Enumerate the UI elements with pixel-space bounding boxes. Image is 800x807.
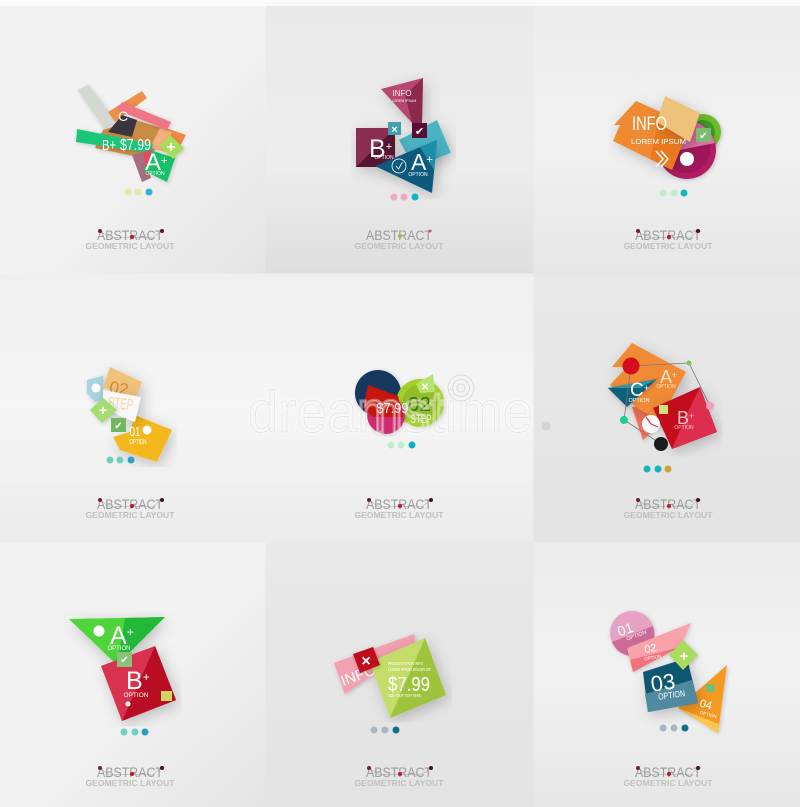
check mark in circle (396, 162, 402, 169)
teal square (399, 120, 451, 167)
step label: STEP (410, 412, 432, 426)
pink circle (610, 611, 654, 655)
orange square (610, 343, 686, 420)
salmon block (632, 405, 667, 440)
salmon facet (630, 647, 680, 672)
orange shade (650, 112, 690, 170)
option A label: + (161, 155, 167, 167)
panel background (534, 542, 800, 807)
option caption: OPTION (145, 171, 165, 177)
label A: + (672, 370, 677, 380)
pink strip (117, 102, 171, 130)
check icon: ✔ (114, 421, 123, 432)
dark card (643, 658, 698, 712)
panel background (0, 6, 266, 274)
logo text: ABSTRACT (97, 496, 163, 512)
option 03 caption: OPTION (658, 688, 686, 702)
step number: 02 (408, 394, 431, 416)
logo text: ABSTRACT (366, 764, 432, 780)
lime tile (416, 374, 435, 393)
info heading: INFO (632, 114, 667, 135)
geometric cluster (355, 370, 444, 434)
panel: top centre, info triangle (266, 6, 534, 274)
teal highlight (608, 379, 657, 388)
pager dots (660, 190, 688, 196)
red square light facet (672, 387, 717, 449)
check tile (111, 418, 126, 432)
green A triangle (143, 150, 175, 182)
small icon (126, 702, 130, 706)
teal triangle (608, 379, 657, 407)
yellow card (113, 415, 172, 462)
watermark word halo: dreamstime (248, 380, 533, 445)
price label: $7.99 (376, 400, 408, 417)
pager dots (644, 466, 672, 472)
green inner ring (691, 120, 715, 144)
watermark (248, 375, 550, 445)
logo text (354, 764, 444, 788)
magenta inner ring (664, 127, 710, 173)
lime diamond (669, 640, 698, 670)
number 03: 03 (649, 668, 677, 697)
logo text: GEOMETRIC LAYOUT (354, 241, 444, 251)
panel background (0, 542, 266, 807)
option A caption: OPTION (408, 172, 428, 178)
peach block (150, 128, 172, 152)
black node (654, 437, 668, 451)
option 01 caption: OPTION (626, 630, 648, 642)
step number: 02 (108, 378, 130, 400)
watermark word: dreamstime (248, 380, 533, 445)
geometric cluster (69, 617, 176, 721)
step label: STEP (107, 395, 134, 414)
logo text: GEOMETRIC LAYOUT (624, 778, 713, 788)
teal triangle (375, 140, 437, 193)
label C: + (644, 383, 649, 393)
lime tile (161, 691, 172, 701)
tan card (103, 367, 142, 400)
red shape (363, 385, 403, 417)
pie icon green (94, 626, 104, 636)
logo text (86, 227, 175, 251)
info triangle shade (405, 78, 423, 123)
option caption A: OPTION (656, 384, 676, 390)
pie icon (680, 152, 694, 166)
inner lime ring (402, 385, 438, 421)
check tile (117, 652, 132, 667)
green circle (685, 114, 721, 150)
plus icon: + (99, 402, 107, 418)
red tile (353, 647, 380, 673)
option B label: + (143, 670, 150, 684)
logo text: ABSTRACT (635, 496, 701, 512)
label A: A (660, 367, 672, 387)
panel: middle centre, circles (266, 274, 534, 542)
panel: middle left, steps (0, 274, 266, 542)
check tile (696, 128, 711, 142)
lorem caption: LOREM IPSUM (631, 137, 686, 146)
card lower facet (645, 680, 698, 712)
red dark facet (122, 646, 176, 721)
lime circle (396, 379, 444, 427)
red square (653, 387, 717, 449)
panel: middle right, network (534, 274, 800, 542)
panel background (266, 274, 534, 542)
option B caption: OPTION (124, 692, 149, 699)
close icon: × (361, 653, 371, 670)
option A label: + (426, 154, 433, 166)
lime diamond (90, 398, 117, 423)
white paper (103, 390, 141, 422)
close tile (388, 122, 401, 135)
check tile (706, 684, 715, 692)
footer caption: ADD YOUR TEXT HERE (388, 693, 421, 698)
plus icon: + (166, 139, 176, 156)
caption lines: PRESENTATION INFO (388, 661, 423, 666)
logo text (86, 496, 175, 520)
maroon shade (356, 128, 395, 167)
plus icon: + (680, 648, 689, 665)
lime facet (390, 638, 446, 718)
small green node (686, 360, 692, 366)
orange arrow house (613, 101, 690, 170)
geometric cluster (334, 634, 446, 718)
tan block (95, 120, 162, 158)
number 04: 04 (698, 698, 713, 712)
logo text: ABSTRACT (366, 496, 432, 512)
check icon: ✔ (699, 131, 708, 142)
panel: top right, info arrow (534, 6, 800, 274)
pie icon on shield (92, 384, 100, 392)
label B: + (689, 411, 694, 421)
geometric cluster (613, 96, 721, 179)
pager dots (390, 194, 418, 200)
red wedge (143, 150, 152, 170)
logo text: GEOMETRIC LAYOUT (354, 778, 444, 788)
logo text: GEOMETRIC LAYOUT (624, 241, 713, 251)
salmon strip (627, 623, 691, 672)
green facet (117, 617, 165, 665)
panel: bottom right, four steps (534, 542, 800, 807)
watermark swirl (448, 375, 474, 401)
teal highlight (420, 140, 437, 170)
label C: C (630, 380, 644, 401)
logo text: GEOMETRIC LAYOUT (624, 510, 713, 520)
pager dots (124, 188, 152, 196)
caption line two: LOREM IPSUM DOLOR SIT (388, 667, 431, 672)
logo text: ABSTRACT (635, 227, 701, 243)
orange right strip (156, 127, 186, 150)
panel: bottom centre, price card (266, 542, 534, 807)
geometric cluster (610, 611, 727, 733)
panel background (534, 274, 800, 542)
logo text: ABSTRACT (366, 227, 432, 243)
logo text: GEOMETRIC LAYOUT (86, 778, 175, 788)
grey strip (78, 85, 115, 130)
pink strip (334, 634, 416, 694)
panel: bottom left, green and red (0, 542, 266, 807)
panel background (266, 542, 534, 807)
check tile (412, 123, 427, 138)
panel background (266, 6, 534, 274)
logo text (354, 496, 444, 520)
logo text: ABSTRACT (97, 227, 163, 243)
geometric cluster (356, 78, 451, 193)
logo text: ABSTRACT (635, 764, 701, 780)
lime tile (659, 405, 668, 414)
info triangle (381, 78, 423, 123)
number 01: 01 (615, 619, 636, 639)
logo text (624, 227, 713, 251)
price: $7.99 (388, 674, 430, 696)
magenta circle (658, 121, 716, 179)
check icon: ✔ (120, 655, 129, 666)
logo text: GEOMETRIC LAYOUT (354, 510, 444, 520)
B option label: B+ (102, 137, 116, 154)
pie wedge (646, 417, 658, 427)
logo text (624, 764, 713, 788)
close icon: × (421, 379, 429, 394)
dark triangle (108, 115, 137, 137)
option B caption: OPTION (374, 155, 394, 161)
pager dots (388, 442, 416, 448)
green triangle (69, 617, 165, 665)
panel background (534, 6, 800, 274)
lime card (370, 638, 446, 718)
orange strip (108, 91, 147, 122)
option A caption: OPTION (107, 646, 131, 652)
pager dots (106, 456, 134, 464)
watermark dot (542, 422, 550, 430)
option caption: OPTION (130, 439, 146, 446)
tan card (657, 96, 700, 142)
option A label: + (127, 625, 134, 639)
pink circle (367, 396, 405, 434)
blue shield (87, 376, 103, 402)
info caption: LOREM IPSUM (392, 99, 416, 103)
logo text: GEOMETRIC LAYOUT (86, 510, 175, 520)
pie icon (142, 426, 152, 434)
geometric cluster (608, 343, 717, 451)
pink circle lower (612, 626, 655, 656)
option A label: A (110, 622, 127, 650)
lime diamond (159, 135, 184, 159)
logo text (86, 764, 175, 788)
yellow facet (678, 708, 719, 733)
magenta highlight (670, 121, 715, 152)
option B label: + (386, 141, 392, 153)
connector lines (624, 363, 710, 444)
option caption C: OPTION (628, 398, 650, 404)
geometric strip cluster (76, 85, 186, 182)
geometric cluster (87, 367, 172, 462)
pager dots (660, 724, 688, 732)
panel background (0, 274, 266, 542)
pink node (706, 402, 714, 410)
logo text: GEOMETRIC LAYOUT (86, 241, 175, 251)
label B: B (677, 408, 689, 428)
logo text: ABSTRACT (97, 764, 163, 780)
option A label: A (411, 149, 426, 175)
red square (101, 646, 176, 721)
option B label: B (126, 667, 143, 695)
mauve strip (132, 153, 151, 182)
orange triangle (678, 665, 727, 733)
option 04 caption: OPTION (699, 710, 717, 719)
chevron icon (656, 151, 668, 167)
option B label: B (369, 135, 386, 163)
red circle (622, 358, 640, 374)
number 02: 02 (643, 642, 658, 656)
option caption B: OPTION (674, 425, 694, 431)
price label: $7.99 (120, 137, 151, 154)
info label: INFO (339, 662, 378, 690)
label C: C (118, 108, 128, 124)
pager dots (370, 726, 400, 734)
pager dots (120, 728, 148, 736)
teal green node (620, 416, 628, 424)
green strip (76, 129, 153, 153)
navy circle (355, 370, 401, 416)
panel: top left, price strips (0, 6, 266, 274)
check icon: ✔ (415, 126, 424, 138)
logo text (624, 496, 713, 520)
option A label: A (145, 149, 161, 176)
maroon square (356, 128, 395, 167)
close icon: × (391, 124, 398, 136)
logo text (354, 227, 444, 251)
option number: 01 (130, 424, 140, 439)
option 02 caption: OPTION (644, 654, 662, 661)
info label: INFO (392, 89, 412, 98)
check circle (392, 159, 406, 173)
white pie (642, 415, 660, 433)
